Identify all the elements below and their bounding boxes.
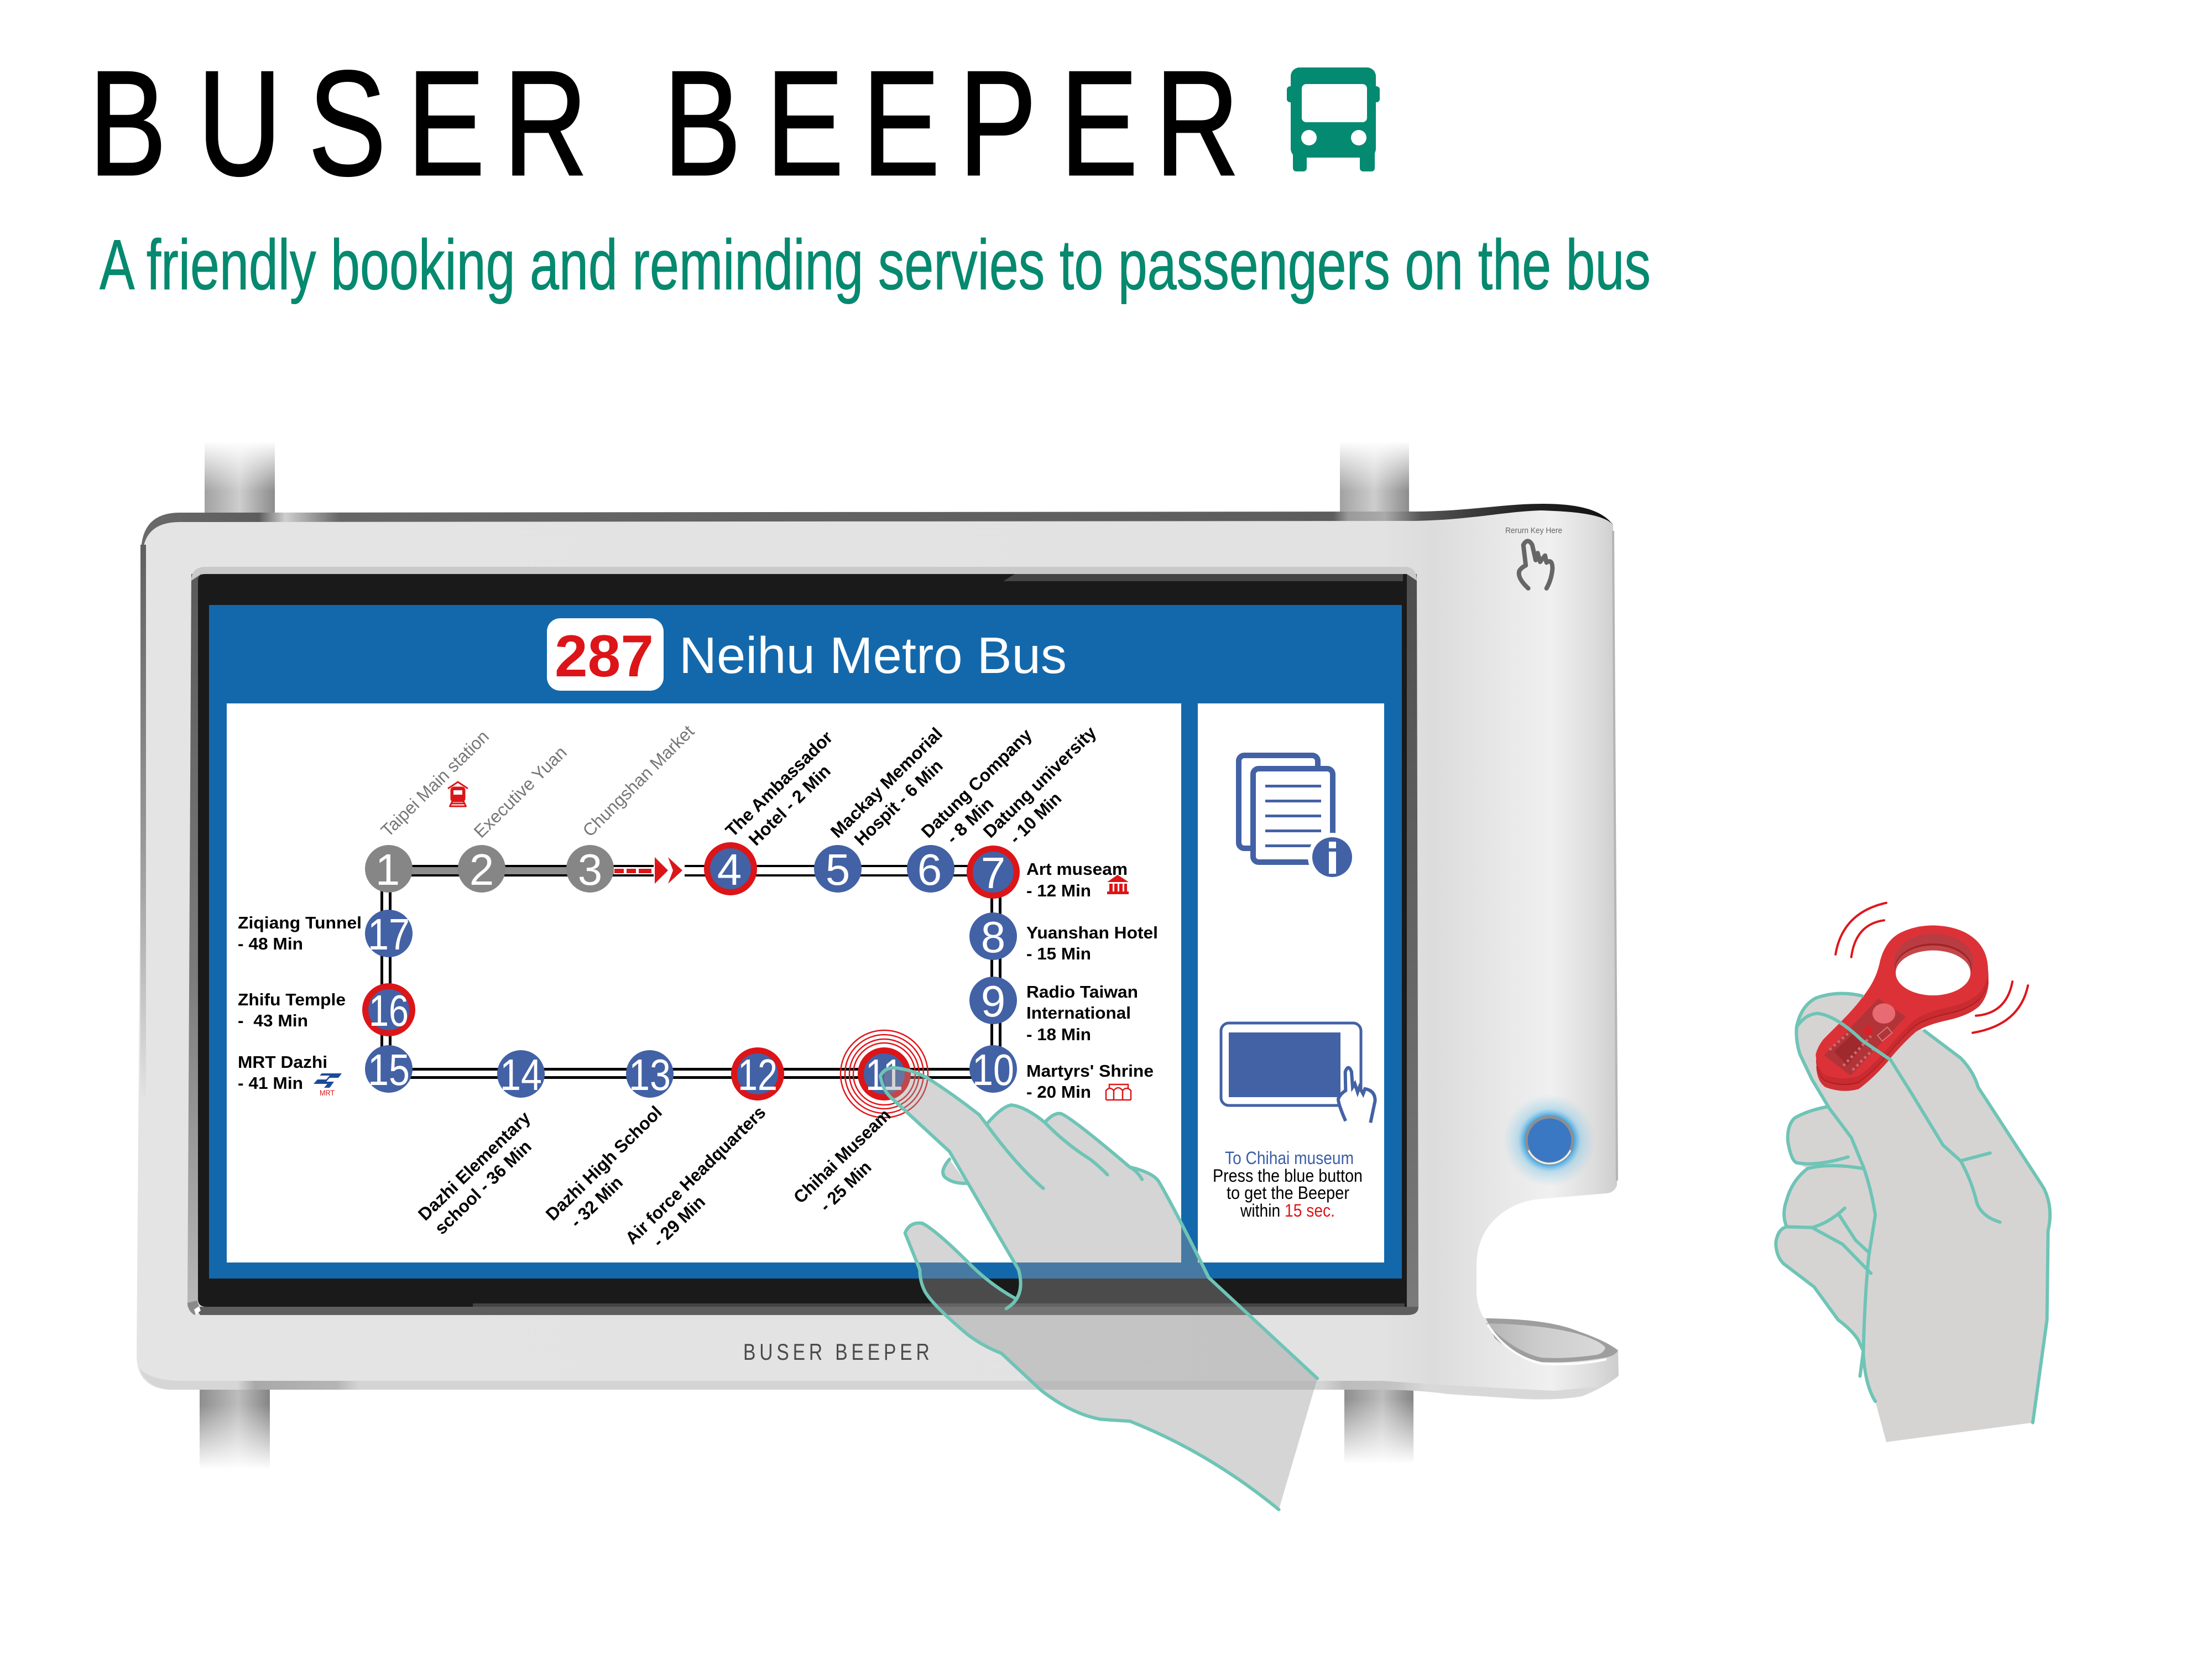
blue screen (209, 605, 1402, 1279)
icon: tablet touch (1221, 1023, 1375, 1123)
station numbers: 7 (981, 848, 1005, 898)
highlighted stations (365, 845, 1016, 1097)
instruction text (1213, 1148, 1363, 1220)
upcoming stations (365, 845, 1017, 1098)
lower edge shading (139, 1369, 1602, 1399)
hand holding beeper (1776, 903, 2050, 1442)
horizontal station labels: - 43 Min (238, 1011, 308, 1030)
instruction text: within 15 sec. (1240, 1201, 1335, 1220)
rotated station labels: - 29 Min (649, 1192, 709, 1251)
station numbers: 1 (375, 845, 400, 894)
hand outline (1776, 993, 2050, 1423)
horizontal station labels: - 20 Min (1026, 1082, 1091, 1102)
rotated station labels: - 32 Min (566, 1172, 627, 1232)
red beeper (1815, 925, 1989, 1091)
rotated station labels: Air force Headquarters (622, 1102, 769, 1248)
horizontal station labels: Zhifu Temple (238, 990, 346, 1009)
horizontal station labels: - 48 Min (238, 934, 303, 953)
station numbers: 12 (738, 1050, 778, 1099)
horizontal station labels: Art museam (1026, 859, 1128, 879)
icon: MRT logo: MRT (320, 1088, 335, 1097)
station numbers: 10 (972, 1045, 1014, 1094)
panel: route map (227, 703, 1181, 1262)
rotated station labels: Dazhi Elementary (414, 1108, 534, 1224)
station numbers: 8 (981, 912, 1005, 962)
icon: art museum (1107, 875, 1129, 894)
beeper tray (1486, 1318, 1618, 1364)
screen header (547, 618, 1067, 691)
station numbers: 4 (717, 845, 742, 894)
instruction text: Press the blue button (1213, 1166, 1363, 1186)
rotated station labels: - 25 Min (816, 1157, 875, 1215)
rotated station labels: Chungshan Market (578, 721, 698, 841)
rotated station labels: Taipei Main station (377, 726, 493, 841)
blue glowing button (1503, 1094, 1596, 1187)
hand fill (1776, 993, 2050, 1442)
station numbers: 2 (469, 845, 494, 894)
panel: side info (1198, 703, 1384, 1262)
rotated station labels: Hospit - 6 Min (851, 755, 947, 849)
rotated station labels: Mackay Memorial (827, 723, 946, 842)
hand touching screen (880, 1068, 1317, 1510)
direction arrow (614, 857, 682, 884)
top left mounting pole (202, 441, 278, 514)
bottom right mounting pole (1342, 1385, 1416, 1471)
kiosk device (137, 504, 1619, 1399)
icon: return key hand (1519, 541, 1552, 588)
rotated station labels: The Ambassador (722, 727, 836, 841)
screen bezel (187, 567, 1418, 1315)
icon: martyrs shrine (1106, 1084, 1131, 1100)
selected station rings (841, 1030, 928, 1118)
horizontal station labels: - 41 Min (238, 1073, 303, 1093)
route lines (380, 865, 1001, 1079)
station numbers: 14 (500, 1050, 542, 1099)
horizontal station labels: Radio Taiwan (1026, 982, 1138, 1001)
instruction text: to get the Beeper (1227, 1183, 1349, 1203)
route name: Neihu Metro Bus (679, 627, 1067, 684)
vibration marks (1835, 903, 2028, 1033)
station numbers: 3 (578, 845, 602, 894)
beeper button (1872, 1003, 1895, 1024)
horizontal station labels: - 12 Min (1026, 881, 1091, 900)
subtitle: A friendly booking and reminding servies to passengers on the bus (100, 226, 1651, 305)
icon: MRT logo (314, 1073, 342, 1097)
horizontal station labels: International (1026, 1003, 1131, 1022)
icon: bus (1287, 67, 1380, 171)
passed stations (365, 845, 614, 893)
circuit board (1824, 999, 1906, 1076)
station numbers: 9 (981, 977, 1005, 1026)
station numbers: 11 (865, 1050, 903, 1099)
rotated station labels: Chihai Museam (790, 1105, 895, 1207)
horizontal station labels: Yuanshan Hotel (1026, 923, 1158, 942)
title: BUSER BEEPER (89, 40, 1239, 207)
rotated station labels: - 8 Min (942, 794, 998, 848)
station numbers: 13 (629, 1050, 671, 1099)
rotated station labels: Dazhi High School (542, 1102, 666, 1224)
rotated station labels (377, 721, 1100, 1251)
horizontal station labels: Martyrs' Shrine (1026, 1061, 1154, 1081)
instruction text: To Chihai museum (1225, 1148, 1354, 1168)
rotated station labels: Hotel - 2 Min (745, 761, 834, 849)
station numbers: 16 (369, 986, 409, 1035)
rotated station labels: Executive Yuan (470, 742, 571, 842)
route number badge: 287 (555, 623, 654, 689)
station numbers: 15 (368, 1045, 410, 1094)
station numbers: 6 (917, 845, 942, 894)
return key label: Rerurn Key Here (1505, 526, 1562, 535)
rotated station labels: school - 36 Min (431, 1136, 535, 1238)
station numbers (368, 845, 1014, 1099)
horizontal station labels: - 15 Min (1026, 944, 1091, 963)
horizontal station labels (238, 859, 1158, 1102)
horizontal station labels: Ziqiang Tunnel (238, 913, 362, 932)
rotated station labels: Datung Company (917, 724, 1036, 842)
icon: train (448, 782, 468, 807)
horizontal station labels: - 18 Min (1026, 1025, 1091, 1044)
station numbers: 5 (826, 845, 850, 894)
device brand label: BUSER BEEPER (743, 1340, 930, 1365)
rotated station labels: Datung university (979, 722, 1100, 842)
station numbers: 17 (368, 910, 410, 959)
stations (365, 845, 1017, 1118)
rotated station labels: - 10 Min (1005, 788, 1065, 848)
horizontal station labels: MRT Dazhi (238, 1052, 327, 1072)
icon: documents info (1239, 755, 1357, 881)
bottom left mounting pole (197, 1385, 273, 1477)
top right mounting pole (1337, 441, 1412, 514)
